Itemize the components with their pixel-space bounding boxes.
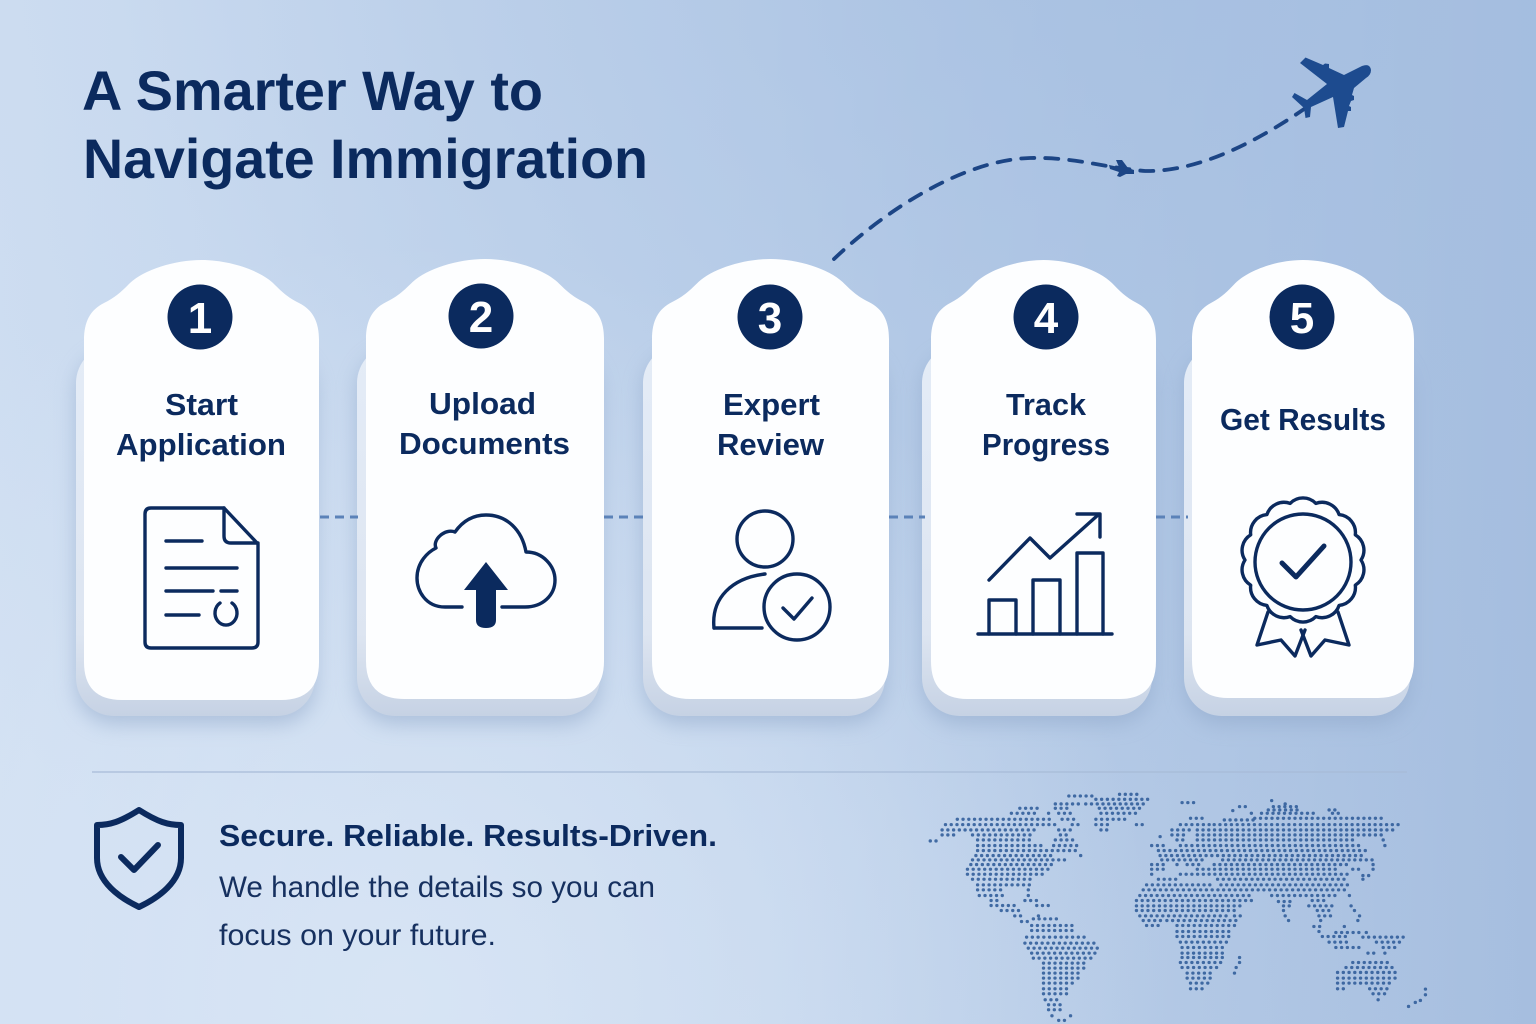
step number 3	[738, 284, 802, 350]
icon: small plane on path	[1109, 160, 1134, 177]
step label: Upload	[429, 386, 536, 421]
text block: reassurance message	[219, 818, 717, 952]
step number 4: 4	[1034, 294, 1059, 343]
step label: Track	[1006, 387, 1087, 422]
step label: Get Results	[1220, 402, 1386, 437]
arrow: dashed flight path	[834, 105, 1310, 259]
step label: Start	[165, 387, 238, 422]
step label	[982, 387, 1110, 462]
step label	[116, 387, 286, 462]
step number 1	[168, 284, 232, 350]
step label	[717, 387, 825, 462]
panel: step 1	[76, 260, 319, 724]
dotted world map	[930, 794, 1425, 1020]
step number 4	[1014, 284, 1078, 350]
icon: person with check	[714, 511, 830, 640]
step label: Application	[116, 427, 286, 462]
connector dashes between cards	[320, 516, 1188, 518]
icon: cloud upload	[417, 515, 555, 628]
step number 2	[448, 284, 514, 348]
step label: Review	[717, 427, 825, 462]
icon: growth chart	[978, 514, 1112, 634]
text block: reassurance message: We handle the details so you can	[219, 871, 655, 904]
step label: Documents	[399, 426, 570, 461]
icon: award rosette	[1242, 498, 1364, 656]
panel: step 5	[1184, 260, 1414, 724]
step label: Progress	[982, 427, 1110, 462]
step label: Expert	[723, 387, 820, 422]
step number 2: 2	[469, 293, 493, 342]
step number 3: 3	[758, 294, 782, 343]
icon: airplane	[1292, 58, 1371, 128]
title: A Smarter Way to	[82, 59, 543, 122]
step label	[399, 386, 570, 461]
panel: step 4	[922, 260, 1156, 724]
text block: reassurance message: focus on your future.	[219, 919, 496, 952]
divider	[92, 771, 1407, 773]
icon: security shield	[97, 810, 181, 907]
step number 1: 1	[188, 294, 212, 343]
panel: step 3	[643, 259, 889, 724]
step number 5	[1270, 284, 1334, 350]
title: Navigate Immigration	[83, 127, 648, 190]
icon: document	[145, 508, 258, 648]
panel: step 2	[357, 259, 604, 724]
step number 5: 5	[1290, 294, 1314, 343]
text block: reassurance message: Secure. Reliable. Results-Driven.	[219, 818, 717, 853]
title	[82, 59, 648, 190]
